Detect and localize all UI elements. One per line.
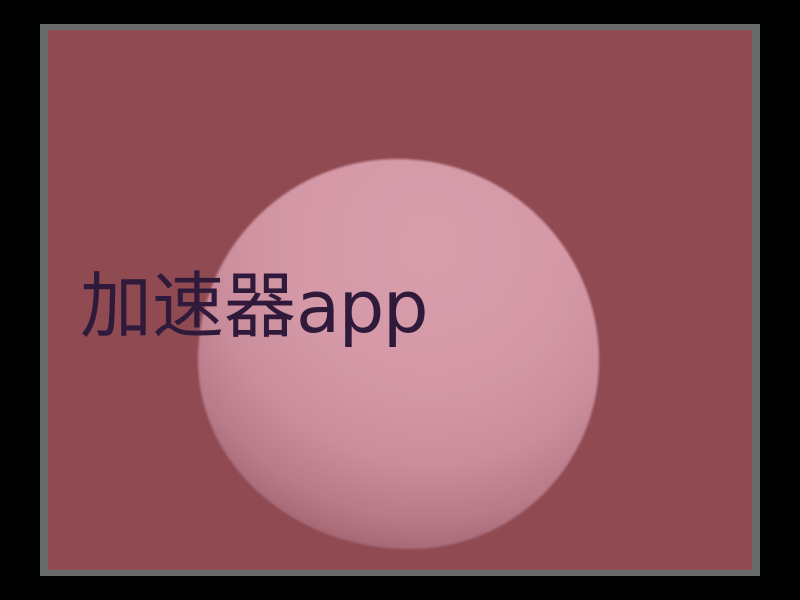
title: 加速器app: [80, 264, 427, 349]
